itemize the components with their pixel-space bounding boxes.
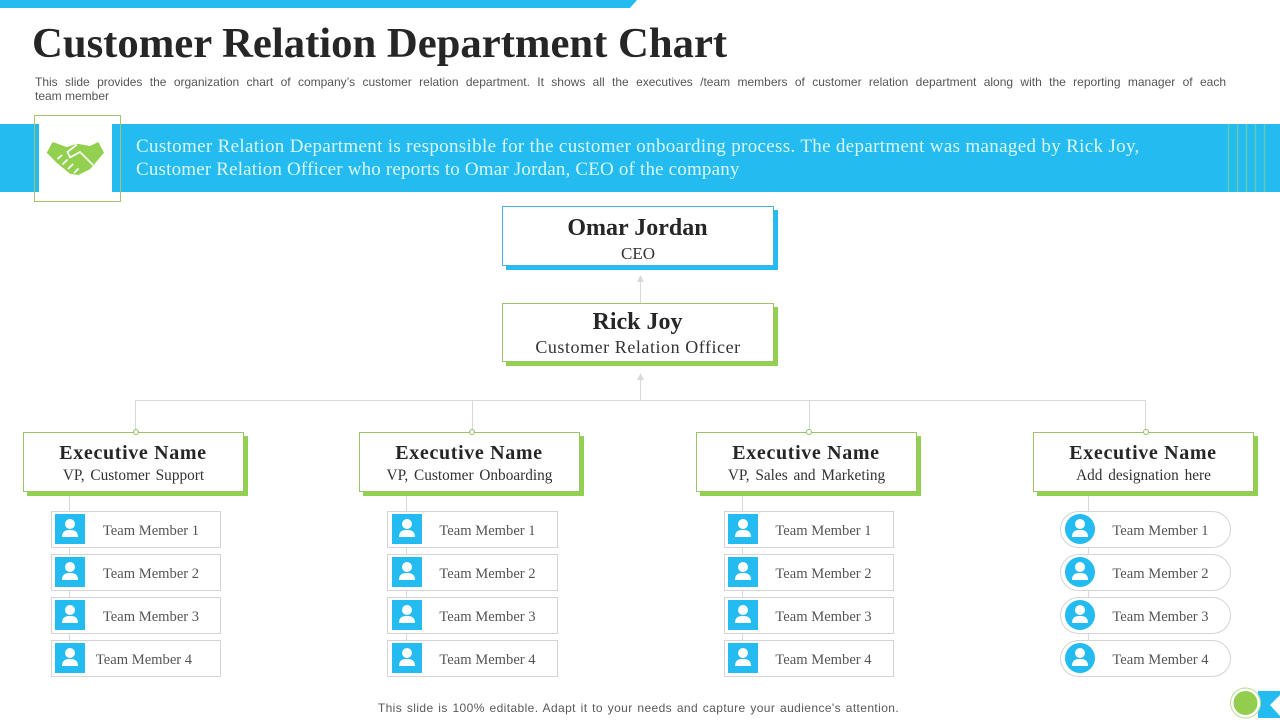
team member 4: Team Member 4 [1112,652,1209,668]
executive box: VP, Customer Support [63,467,204,484]
team member 4 [51,640,221,677]
column: Add designation [1033,429,1258,677]
team member 2 [1060,554,1231,591]
executive box: Executive Name [59,442,207,464]
box: Customer Relation Officer: Rick Joy [592,309,682,335]
team member 1 [387,511,558,548]
executive box: VP, Sales and Marketing [728,467,885,484]
executive box: VP, Customer Onboarding [387,467,552,484]
description: team member [35,88,109,102]
team member 3: Team Member 3 [439,609,536,625]
team member 1 [724,511,894,548]
box: Customer Relation Officer [502,303,774,362]
team member 4: Team Member 4 [439,652,536,668]
team member 1: Team Member 1 [439,523,536,539]
team member 2 [387,554,558,591]
team member 4: Team Member 4 [96,652,192,668]
team member 3 [387,597,558,634]
team member 4 [724,640,894,677]
title: Customer Relation Department Chart [32,20,727,67]
team member 2 [51,554,221,591]
connector: org chart lines [135,275,1146,430]
executive box [1033,432,1254,492]
footer note: This slide is 100% editable. Adapt it to your needs and capture your audience's attention. [378,701,899,715]
team member 1: Team Member 1 [103,523,199,539]
team member 2: Team Member 2 [1112,566,1209,582]
description: This slide provides the organization chart of company’s customer relation department. It shows all the executives /team members of customer relation department along with the reporting manager of each [35,75,1226,89]
connector dot [1143,429,1149,435]
icon: handshake [34,115,121,202]
column: Customer Onboarding [359,429,584,677]
connector dot [469,429,475,435]
banner text: Customer Relation Department is responsible for the customer onboarding process. The department was managed by Rick Joy, [136,136,1140,157]
team member 4 [387,640,558,677]
team member 2: Team Member 2 [775,566,872,582]
team member 1 [1060,511,1231,548]
team member 4: Team Member 4 [775,652,872,668]
team member 4 [1060,640,1231,677]
team member 3: Team Member 3 [775,609,872,625]
team member 3 [724,597,894,634]
box: CEO [502,206,774,266]
team member 3: Team Member 3 [103,609,199,625]
executive box: Executive Name [395,442,543,464]
connector dot [806,429,812,435]
column: Customer Support [23,429,248,677]
banner text: Customer Relation Officer who reports to Omar Jordan, CEO of the company [136,159,740,180]
executive box [696,432,917,492]
executive box: Executive Name [732,442,880,464]
team member 2 [724,554,894,591]
team member 1 [51,511,221,548]
executive box [23,432,244,492]
box: Customer Relation Officer: Customer Relation Officer [535,337,741,357]
banner decorative stripes [1228,124,1266,192]
executive box [359,432,580,492]
team member 3: Team Member 3 [1112,609,1209,625]
icon: corner badge [1230,688,1280,718]
team member 1: Team Member 1 [775,523,872,539]
box: CEO: CEO [621,244,655,263]
banner text [136,136,1140,180]
banner [0,124,1280,192]
team member 1: Team Member 1 [1112,523,1209,539]
executive box: Executive Name [1069,442,1217,464]
column: Sales and Marketing [696,429,921,677]
top accent bar [0,0,637,8]
team member 2: Team Member 2 [103,566,199,582]
executive box: Add designation here [1076,467,1211,484]
team member 3 [1060,597,1231,634]
team member 3 [51,597,221,634]
team member 2: Team Member 2 [439,566,536,582]
box: CEO: Omar Jordan [567,215,708,241]
connector dot [133,429,139,435]
description [35,75,1226,102]
